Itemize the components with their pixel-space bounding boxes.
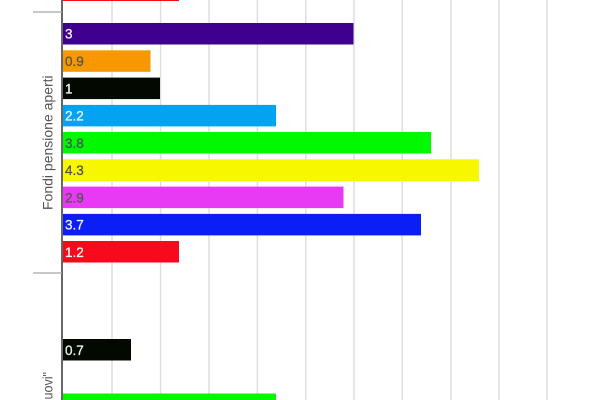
bar: black 1: 1 [65,81,73,96]
bar: yellow 4.3 [63,159,479,181]
bar: magenta 2.9: 2.9 [65,190,84,205]
bar: yellow 4.3: 4.3 [65,163,84,178]
bar: previous group red [63,0,179,1]
bar: red 1.2: 1.2 [65,245,84,260]
bar: black 1 [63,78,160,99]
bar: orange 0.9 [63,50,150,72]
bar: light blue 2.2 [63,105,276,126]
bar: purple 3 [63,23,354,44]
axis label: Fondi pensione aperti: Fondi pensione aperti [40,75,56,210]
bar: red 1.2 [63,241,179,262]
axis label: nuovi: uovi" [40,372,56,400]
bar: green 3.8 [63,132,431,154]
bar: light blue 2.2: 2.2 [65,109,84,124]
bar: blue 3.7 [63,214,421,235]
bar: black 0.7: 0.7 [65,343,84,358]
axis line [61,0,63,400]
category tick top [33,11,62,13]
bar: magenta 2.9 [63,187,344,208]
category tick bottom [33,272,62,274]
bar: blue 3.7: 3.7 [65,218,84,233]
bar: black 0.7 [63,339,131,360]
bar: green 3.8: 3.8 [65,136,84,151]
bar: orange 0.9: 0.9 [65,54,84,69]
bar: purple 3: 3 [65,27,73,42]
bar: green partial [63,394,276,400]
